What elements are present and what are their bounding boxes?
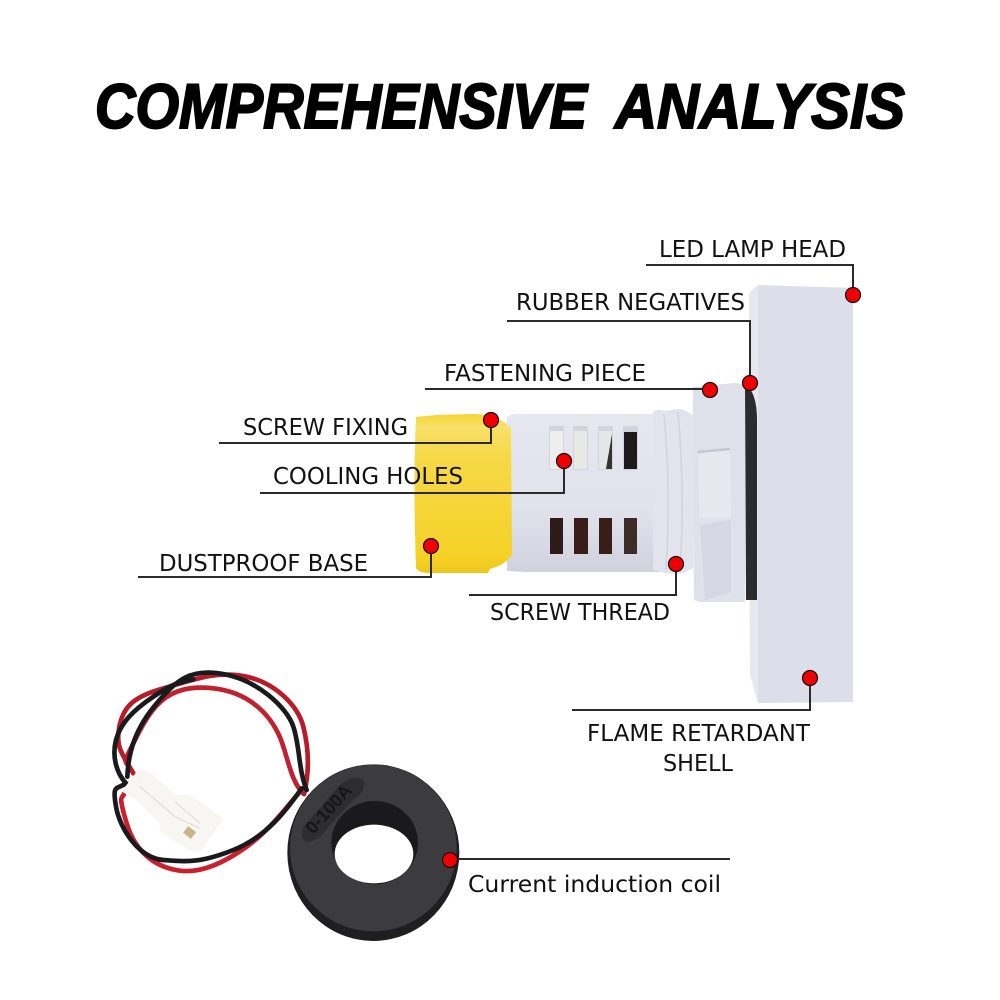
callout labels: SCREW FIXING (243, 415, 408, 441)
title: COMPREHENSIVE (95, 72, 589, 142)
callout labels: DUSTPROOF BASE (159, 551, 368, 577)
title: ANALYSIS (613, 72, 905, 142)
callout dots (424, 288, 860, 868)
flame retardant shell (749, 285, 853, 703)
yellow dustproof base (414, 414, 512, 573)
callout labels: SCREW THREAD (490, 600, 670, 626)
callout labels: FLAME RETARDANT (587, 721, 811, 747)
rubber gasket (745, 384, 757, 600)
callout labels: Current induction coil (468, 872, 721, 898)
title (95, 72, 905, 142)
coil ring (287, 764, 459, 941)
white cylinder body (507, 414, 660, 572)
fastening nut (693, 383, 745, 602)
wires (114, 672, 308, 871)
connector (122, 769, 223, 853)
screw thread (653, 409, 693, 574)
cooling holes (549, 426, 638, 554)
callout labels: FASTENING PIECE (444, 361, 646, 387)
product: LED indicator side view (414, 285, 853, 703)
callout labels (159, 237, 846, 898)
callout labels: LED LAMP HEAD (659, 237, 846, 263)
callout lines (138, 265, 853, 859)
current induction coil with wires (114, 672, 459, 941)
coil ring: 0-100A (301, 780, 356, 838)
callout labels: SHELL (663, 751, 733, 777)
callout labels: COOLING HOLES (273, 464, 463, 490)
callout labels: RUBBER NEGATIVES (516, 290, 745, 316)
